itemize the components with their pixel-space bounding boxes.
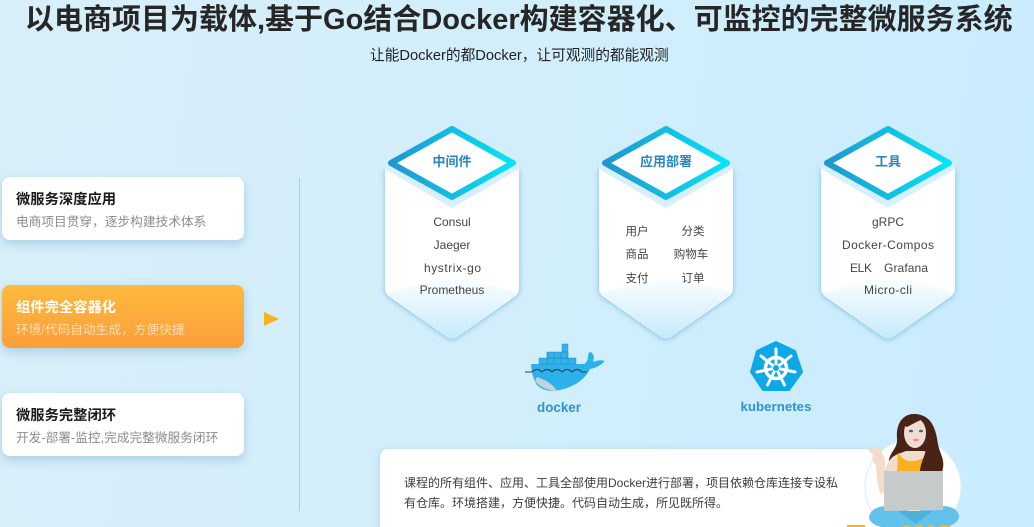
panel: tools: gRPC: [872, 215, 904, 229]
arrow: [264, 312, 279, 326]
card: closed loop: [2, 393, 244, 456]
panel: tools: Docker-Compos: [842, 238, 934, 252]
panel: tools: [821, 129, 955, 338]
card: microservice deep application: 微服务深度应用: [16, 192, 116, 208]
panel: application deployment: 购物车: [674, 247, 708, 261]
panel: middleware: [385, 129, 519, 338]
icon: kubernetes wheel: kubernetes: [741, 399, 811, 414]
illustration: woman with laptop: [847, 414, 962, 527]
panel: tools: ELK: [850, 261, 872, 275]
panel: application deployment: 应用部署: [640, 154, 692, 169]
panel: middleware: hystrix-go: [424, 261, 481, 275]
card: closed loop: 开发-部署-监控,完成完整微服务闭环: [16, 430, 218, 444]
panel: tools: Grafana: [884, 261, 928, 275]
panel: middleware: Prometheus: [420, 283, 484, 297]
panel: application deployment: 支付: [626, 272, 648, 285]
card: microservice deep application: [2, 177, 244, 240]
panel: middleware: 中间件: [432, 154, 472, 169]
card: full containerization (highlighted): 环境/代码自动生成，方便快捷: [16, 322, 184, 336]
panel: application deployment: 订单: [682, 272, 704, 285]
card: full containerization (highlighted): 组件完全容器化: [16, 300, 116, 316]
description text: 课程的所有组件、应用、工具全部使用Docker进行部署，项目依赖仓库连接专设私: [404, 476, 838, 490]
subtitle: 让能Docker的都Docker，让可观测的都能观测: [370, 48, 669, 64]
icon: docker whale: [525, 344, 605, 415]
card: full containerization (highlighted): [2, 285, 244, 348]
description text: 有仓库。环境搭建，方便快捷。代码自动生成，所见既所得。: [404, 496, 728, 510]
card: microservice deep application: 电商项目贯穿，逐步构建技术体系: [16, 214, 206, 228]
panel: middleware: Consul: [433, 215, 471, 229]
panel: middleware: Jaeger: [434, 238, 470, 252]
bottom description card: [380, 449, 880, 527]
card: closed loop: 微服务完整闭环: [16, 408, 116, 424]
description text: [404, 476, 838, 510]
panel: application deployment: [599, 129, 733, 338]
icon: docker whale: docker: [537, 400, 582, 415]
panel: tools: Micro-cli: [864, 283, 912, 297]
title: 以电商项目为载体,基于Go结合Docker构建容器化、可监控的完整微服务系统: [25, 4, 1013, 36]
panel: application deployment: 用户: [626, 224, 648, 238]
panel: application deployment: 分类: [682, 224, 705, 238]
panel: application deployment: 商品: [626, 247, 648, 261]
icon: kubernetes wheel: [741, 342, 811, 414]
panel: tools: 工具: [875, 154, 901, 169]
